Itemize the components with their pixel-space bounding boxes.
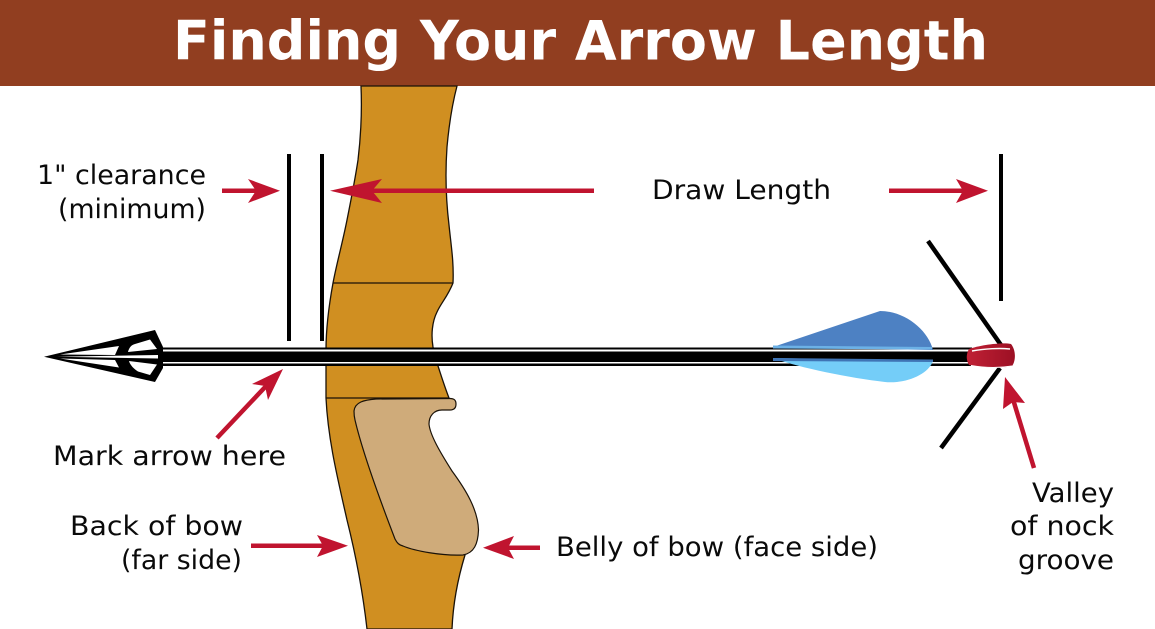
light blue vane xyxy=(773,358,933,382)
valley of nock label xyxy=(1010,478,1114,576)
arrow: draw length left xyxy=(330,179,594,203)
clearance marker lines xyxy=(287,154,324,341)
vane ribs xyxy=(773,346,933,362)
bow riser xyxy=(326,86,478,629)
shaft xyxy=(160,348,972,366)
valley of nock label: groove xyxy=(1018,545,1114,576)
draw length label: Draw Length xyxy=(652,175,831,206)
back of bow label: Back of bow xyxy=(70,511,243,542)
back of bow label xyxy=(70,511,243,576)
arrow: mark arrow here xyxy=(217,369,283,438)
arrow: valley of nock xyxy=(1003,377,1034,468)
mark arrow label: Mark arrow here xyxy=(53,441,286,472)
clearance label xyxy=(37,160,206,225)
draw length end marker xyxy=(999,154,1003,301)
arrow: back of bow xyxy=(251,535,348,557)
grip xyxy=(354,398,478,555)
title banner xyxy=(0,0,1155,86)
valley of nock label: Valley xyxy=(1032,478,1114,509)
arrow: draw length right xyxy=(889,179,988,203)
arrow: clearance xyxy=(222,179,280,203)
clearance label: (minimum) xyxy=(58,194,206,225)
valley of nock label: of nock xyxy=(1010,511,1114,542)
bowstring xyxy=(928,241,1001,448)
belly of bow label: Belly of bow (face side) xyxy=(556,532,878,563)
dark blue vane xyxy=(773,311,933,350)
bow section lines xyxy=(326,283,453,398)
arrow xyxy=(44,311,1015,382)
clearance label: 1" clearance xyxy=(37,160,206,191)
arrow: belly of bow xyxy=(483,536,540,559)
nock xyxy=(967,343,1015,368)
title: Finding Your Arrow Length xyxy=(173,10,988,72)
back of bow label: (far side) xyxy=(121,545,242,576)
broadhead xyxy=(44,330,163,382)
